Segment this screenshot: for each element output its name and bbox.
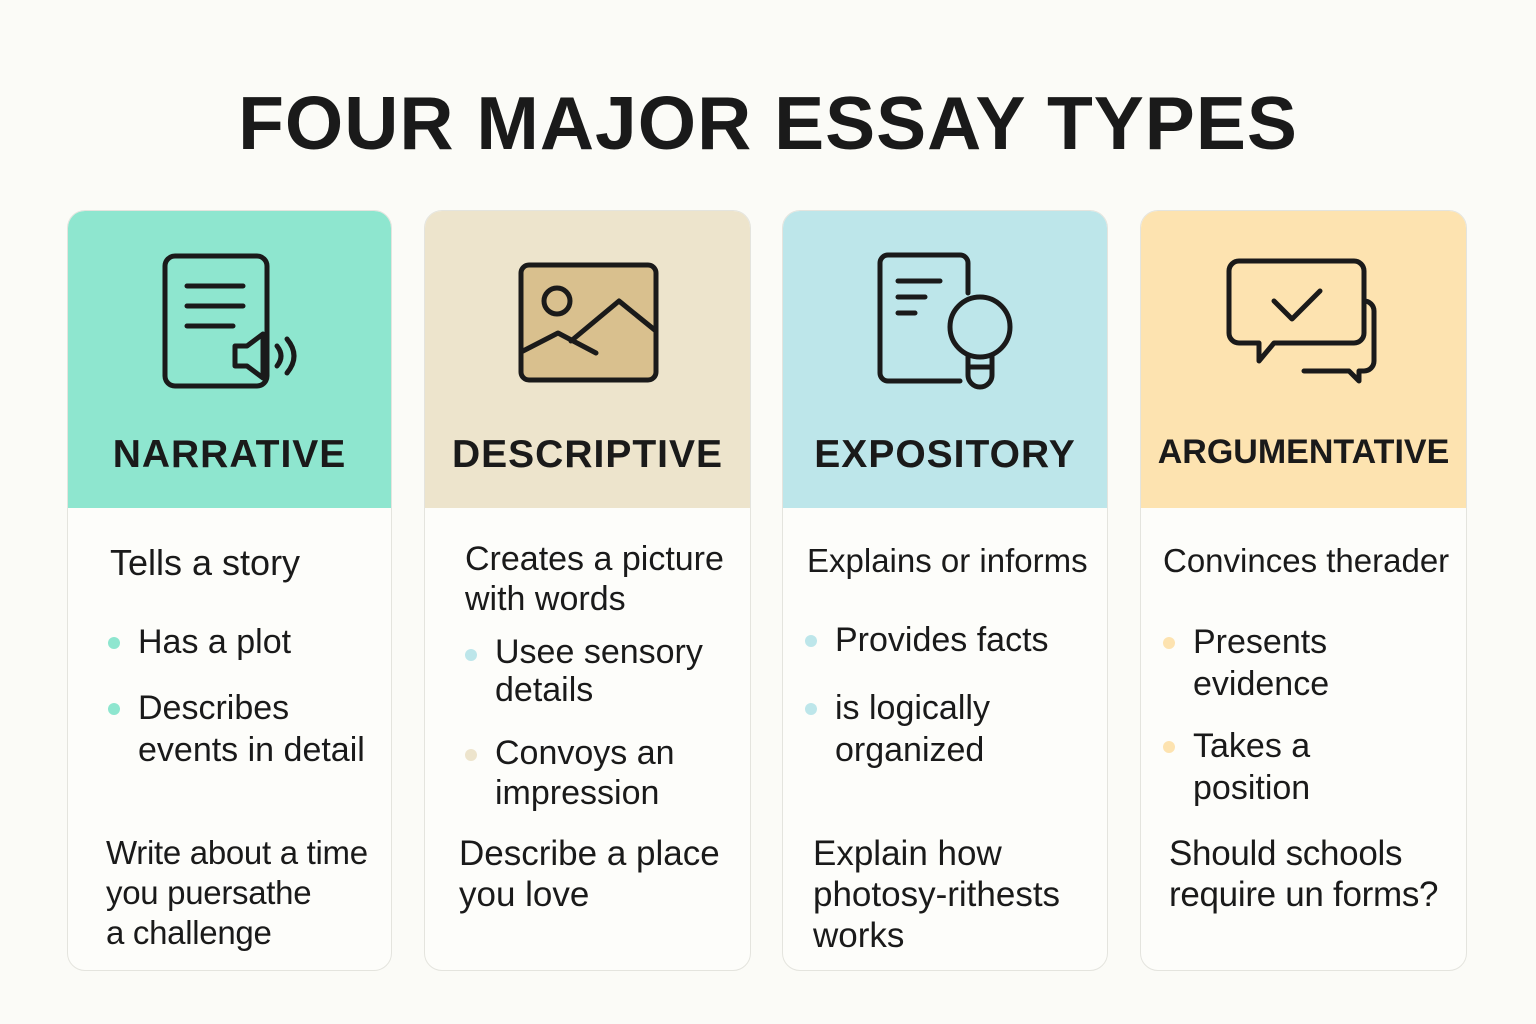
- text: definition: [465, 540, 724, 618]
- bullets: Has a plot: [138, 623, 291, 661]
- header: narrative: [68, 211, 391, 508]
- example prompt: Explain how: [813, 834, 1002, 873]
- example prompt: a challenge: [106, 914, 272, 951]
- icon: document with lightbulb: [878, 252, 1012, 390]
- header: argumentative: ARGUMENTATIVE: [1158, 433, 1449, 471]
- title: FOUR MAJOR ESSAY TYPES: [238, 81, 1298, 165]
- example prompt: require un forms?: [1169, 875, 1438, 914]
- bullets: [465, 633, 703, 812]
- header: narrative: NARRATIVE: [113, 433, 346, 476]
- bullets: evidence: [1193, 665, 1329, 703]
- bullets: Describes: [138, 689, 289, 727]
- text: definition: with words: [465, 580, 626, 618]
- example prompt: [813, 834, 1060, 955]
- panel: descriptive: [424, 210, 751, 971]
- header: descriptive: DESCRIPTIVE: [452, 433, 723, 476]
- text: definition: Convinces therader: [1163, 542, 1449, 579]
- bullets: events in detail: [138, 731, 365, 769]
- bullets: Usee sensory: [495, 633, 703, 671]
- header: argumentative: [1141, 211, 1466, 508]
- example prompt: [106, 834, 368, 951]
- bullets: Takes a: [1193, 727, 1310, 765]
- example prompt: [1169, 834, 1438, 914]
- example prompt: Should schools: [1169, 834, 1402, 873]
- bullets: Provides facts: [835, 621, 1049, 659]
- bullets: [1163, 623, 1329, 807]
- header: descriptive: [425, 211, 750, 508]
- bullets: position: [1193, 769, 1310, 807]
- bullets: [108, 623, 365, 769]
- bullets: Presents: [1193, 623, 1327, 661]
- example prompt: you puersathe: [106, 874, 311, 911]
- icon: document with speaker: [162, 254, 297, 388]
- example prompt: works: [813, 916, 904, 955]
- bullets: impression: [495, 774, 659, 812]
- panel: expository: [782, 210, 1108, 971]
- panel: argumentative: [1140, 210, 1467, 971]
- text: definition: Creates a picture: [465, 540, 724, 578]
- example prompt: Write about a time: [106, 834, 368, 871]
- example prompt: [459, 834, 720, 914]
- panel: narrative: [67, 210, 392, 971]
- bullets: Convoys an: [495, 734, 675, 772]
- text: definition: Tells a story: [110, 542, 300, 583]
- text: definition: Explains or informs: [807, 542, 1088, 579]
- header: expository: [783, 211, 1107, 508]
- bullets: [805, 621, 1049, 769]
- bullets: organized: [835, 731, 984, 769]
- bullets: details: [495, 671, 593, 709]
- header: expository: EXPOSITORY: [814, 433, 1076, 476]
- example prompt: you love: [459, 875, 589, 914]
- icon: picture: [518, 262, 658, 382]
- bullets: is logically: [835, 689, 990, 727]
- example prompt: photosy-rithests: [813, 875, 1060, 914]
- example prompt: Describe a place: [459, 834, 720, 873]
- icon: speech bubbles with check: [1226, 258, 1376, 384]
